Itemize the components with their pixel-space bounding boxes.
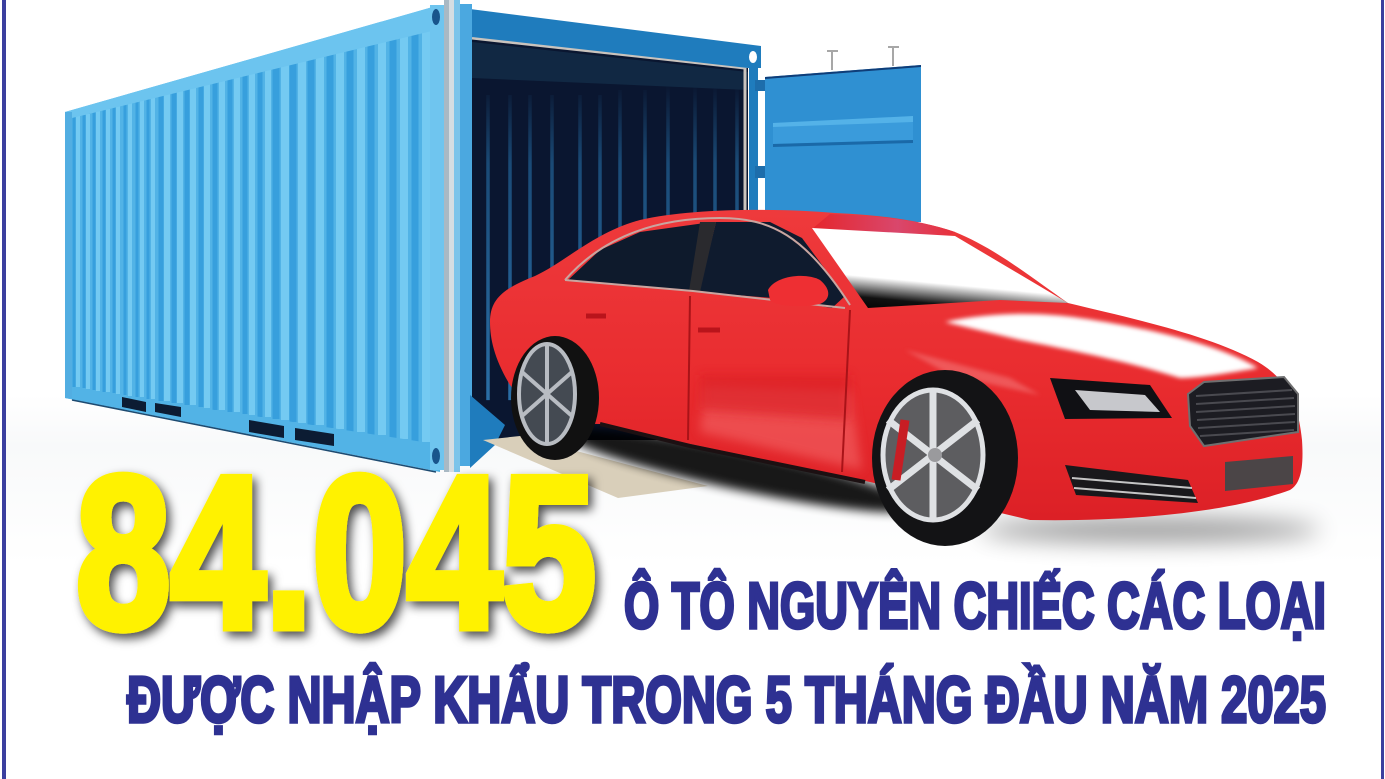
hood highlight: [945, 314, 1258, 378]
corrugation highlights: [78, 31, 426, 442]
light trim: [472, 38, 745, 220]
licence plate area: [1225, 456, 1293, 491]
front wheel arch and tyre: [872, 370, 1018, 546]
shipping container: [65, 0, 921, 472]
door panel bar: [773, 117, 913, 144]
chrome window trim: [565, 218, 850, 308]
big number: 84.045: [76, 431, 596, 673]
door sill: [470, 395, 505, 468]
corner castings: [432, 9, 440, 25]
bottom rail: [65, 387, 436, 470]
floor tint: [6, 395, 1380, 565]
red car: [490, 210, 1302, 546]
side reflection: [700, 385, 862, 470]
door handles: [586, 316, 720, 330]
car body: [490, 210, 1302, 520]
roof tint: [812, 214, 955, 238]
front wheel rim: [883, 390, 983, 520]
interior ribs: [488, 85, 737, 400]
open interior: [472, 37, 748, 440]
corner hole: [749, 51, 757, 63]
fork pockets: [122, 397, 334, 446]
door latches: [827, 46, 899, 70]
mirror: [768, 276, 828, 306]
door hinges: [755, 80, 767, 178]
container side wall: [65, 5, 440, 472]
front side window: [699, 222, 845, 308]
front top rail: [470, 9, 761, 68]
window pillar: [689, 222, 716, 292]
rear wheel rim: [519, 344, 575, 444]
rear side window: [568, 222, 712, 291]
headlight: [1050, 378, 1172, 419]
frame: right bar: [1381, 0, 1384, 779]
frame: left bar: [2, 0, 6, 779]
grille: [1188, 377, 1298, 446]
left corner post: [65, 112, 72, 398]
headlight lens: [1075, 390, 1160, 412]
brake caliper: [896, 420, 905, 480]
ground shadows: [560, 413, 1320, 542]
ramp: [483, 436, 708, 498]
right door post: [749, 66, 758, 226]
lower air vent: [1065, 465, 1198, 503]
top rail: [65, 6, 436, 118]
sill trim: [600, 424, 865, 482]
corrugation shadows: [74, 33, 415, 442]
fender highlight: [905, 350, 1040, 395]
door seams: [688, 296, 850, 472]
door rods column: [430, 0, 472, 472]
base shadow line: [72, 400, 436, 472]
windshield: [812, 228, 1068, 308]
interior ceiling: [472, 42, 748, 90]
open door: [765, 46, 921, 222]
rear wheel tyre: [511, 336, 599, 460]
